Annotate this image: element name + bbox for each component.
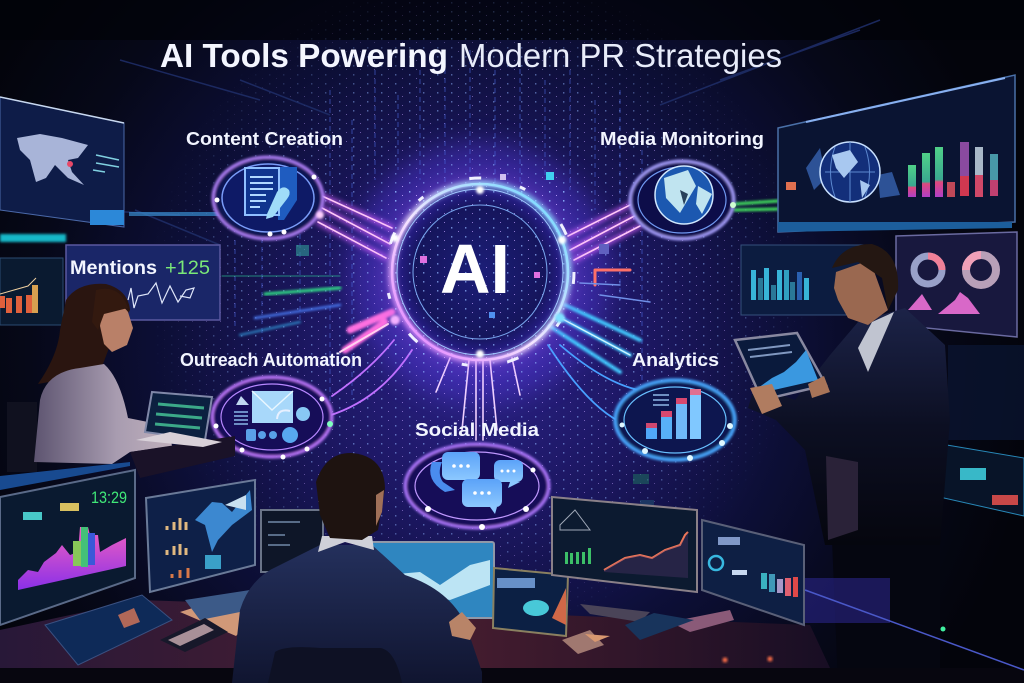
- mentions count: +125: [165, 258, 210, 279]
- face: [100, 305, 133, 352]
- right wall panel: donuts: [896, 232, 1017, 337]
- man from behind: [232, 453, 482, 683]
- title: AI Tools Powering: [160, 37, 448, 74]
- head: [316, 453, 385, 540]
- bar chart: [908, 142, 998, 197]
- node: outreach automation: [180, 350, 362, 460]
- right monitors: [552, 497, 804, 654]
- blue ledge behind left monitor: [0, 462, 130, 490]
- right lower wall panels: [935, 345, 1024, 516]
- content creation label: Content Creation: [186, 128, 343, 149]
- mentions panel: [66, 245, 220, 320]
- tablet: [735, 333, 826, 400]
- media monitoring icon: [630, 161, 736, 239]
- woman at laptop: [7, 284, 235, 478]
- jacket: [748, 308, 950, 545]
- hand: [449, 612, 476, 640]
- outreach icon: [212, 377, 333, 460]
- face: [834, 260, 888, 325]
- right man with tablet: [735, 244, 950, 683]
- AI label: AI: [440, 230, 510, 308]
- hair back: [38, 284, 130, 384]
- right wall panel: globe dashboard: [778, 75, 1015, 232]
- laptop: [136, 392, 222, 447]
- torso: [34, 364, 172, 464]
- globe: [806, 142, 900, 202]
- center monitors: [261, 510, 568, 636]
- mentions sparkline: [128, 283, 194, 308]
- chair: [7, 402, 37, 472]
- right wall panel: blue bars: [741, 245, 866, 315]
- second monitor: [146, 480, 255, 592]
- content creation icon: [213, 157, 324, 239]
- analytics label: Analytics: [632, 350, 719, 370]
- desk surface: [0, 578, 1024, 683]
- analytics icon: [615, 380, 735, 461]
- chair back: [268, 647, 402, 683]
- outreach automation label: Outreach Automation: [180, 350, 362, 370]
- title: Modern PR Strategies: [459, 37, 782, 74]
- node: analytics: [615, 350, 735, 461]
- title: [160, 37, 782, 74]
- desk: [130, 436, 235, 478]
- central AI hub: [386, 172, 609, 366]
- media monitoring label: Media Monitoring: [600, 128, 764, 149]
- mentions label: Mentions: [70, 258, 157, 279]
- left monitor: [0, 470, 135, 625]
- hair: [832, 244, 898, 310]
- connector lines: [222, 196, 778, 440]
- left lower tablet, keyboard and papers: [45, 590, 252, 665]
- clock readout: 13:29: [91, 488, 127, 507]
- legs: [832, 540, 940, 683]
- hands: [750, 384, 782, 414]
- back body: [232, 545, 482, 683]
- social media icon: [405, 444, 549, 530]
- node: media monitoring: [600, 128, 764, 239]
- node: social media: [405, 420, 549, 530]
- social media label: Social Media: [415, 420, 540, 440]
- node: content creation: [186, 128, 343, 239]
- area bar chart: [18, 527, 126, 590]
- left wall panel: world map: [0, 97, 124, 325]
